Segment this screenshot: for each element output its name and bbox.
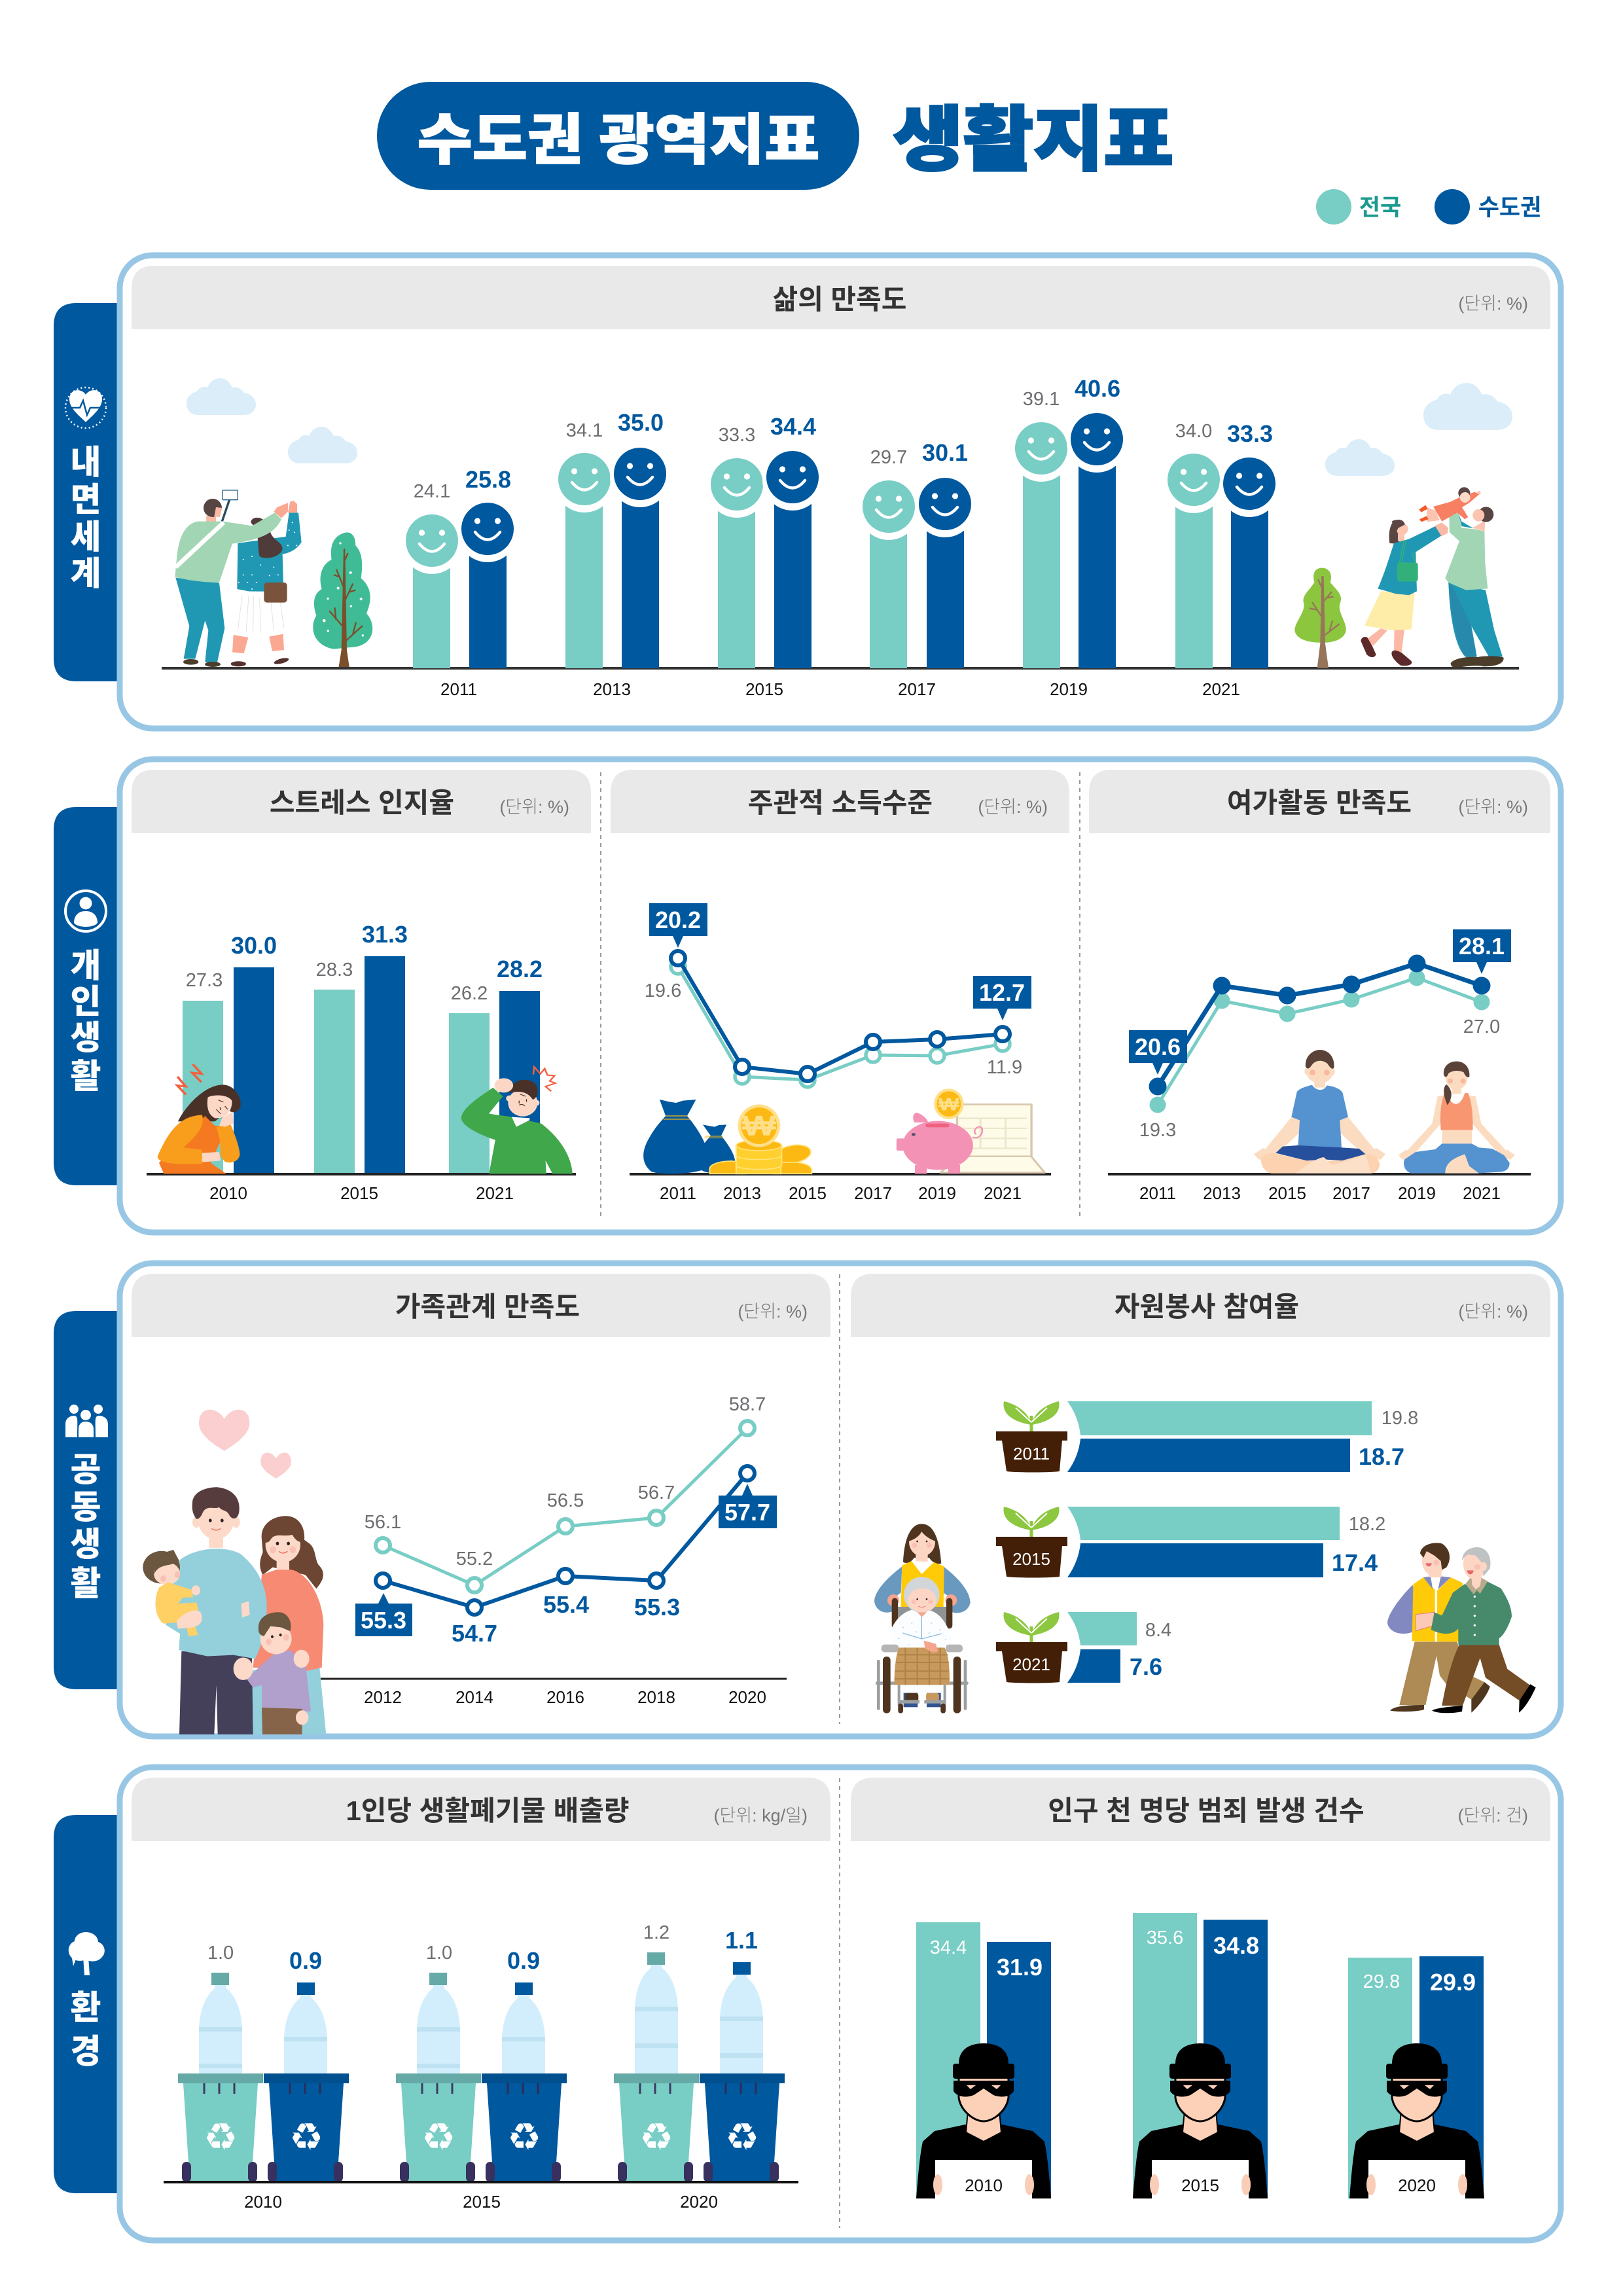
2015 row: 18.2 — [1349, 1514, 1385, 1535]
header: 자원봉사 참여율: (단위: %) — [1458, 1302, 1528, 1321]
2020 bottles and bins: ♻ — [725, 2115, 759, 2159]
2020 bottles and bins: ♻ — [639, 2115, 673, 2159]
2021 row: 2021 — [1012, 1655, 1050, 1674]
illustration: family — [143, 1410, 326, 1734]
line chart: 가족관계 만족도: 2020 — [728, 1687, 766, 1707]
tab: 개인생활: 인 — [71, 983, 101, 1020]
title pill — [377, 82, 859, 190]
2017 bars: 30.1 — [922, 439, 968, 466]
line chart: 가족관계 만족도: 2014 — [455, 1687, 493, 1707]
2021 bars: 33.3 — [1227, 420, 1273, 447]
2021 row: 7.6 — [1130, 1653, 1162, 1680]
callout: 28.1 — [1453, 929, 1511, 974]
line chart: 주관적 소득수준: 19.6 — [645, 980, 681, 1001]
header: 인구 천 명당 범죄 발생 건수: 인구 천 명당 범죄 발생 건수 — [1048, 1795, 1364, 1826]
header: 인구 천 명당 범죄 발생 건수: (단위: 건) — [1457, 1806, 1528, 1825]
line chart: 주관적 소득수준: 2021 — [984, 1183, 1022, 1203]
panel: 개인생활 — [54, 759, 1561, 1232]
callout: 20.6: 20.6 — [1135, 1033, 1181, 1060]
2019 bars: 39.1 — [1023, 389, 1060, 410]
2021 row: 8.4 — [1145, 1620, 1171, 1641]
line chart: 주관적 소득수준: 2011 — [660, 1183, 696, 1203]
header: 스트레스 인지율: (단위: %) — [499, 797, 569, 817]
header: 가족관계 만족도 — [132, 1274, 830, 1337]
bar chart: 자원봉사 참여율 — [996, 1401, 1418, 1683]
2010 bottles and bins: 0.9 — [289, 1947, 322, 1974]
line chart: 주관적 소득수준 — [630, 903, 1051, 1203]
illustration: couple taking selfie — [175, 490, 302, 667]
2015 bars and thief: 35.6 — [1147, 1928, 1183, 1948]
2013 bars: 2013 — [593, 679, 631, 699]
header: 가족관계 만족도: 가족관계 만족도 — [395, 1291, 580, 1322]
bar chart: 스트레스 인지율: 31.3 — [362, 921, 408, 948]
tab: 공동생활 — [54, 1311, 117, 1689]
2021 bars: 2021 — [1202, 679, 1240, 699]
tab: 개인생활: 활 — [71, 1058, 101, 1095]
tab: 내면세계 — [54, 303, 117, 681]
2020 bottles and bins: 2020 — [680, 2192, 718, 2212]
header: 자원봉사 참여율 — [851, 1274, 1550, 1337]
line chart: 가족관계 만족도 — [321, 1394, 787, 1707]
2020 bottles and bins: 1.2 — [643, 1922, 669, 1943]
chart: 생활폐기물 배출량 — [164, 1922, 798, 2212]
2015 row — [996, 1507, 1385, 1577]
2020 bottles and bins — [614, 1922, 785, 2212]
2010 bars and thief: 2010 — [965, 2176, 1003, 2195]
2015 bottles and bins: ♻ — [507, 2115, 541, 2159]
legend: 수도권 — [1478, 195, 1541, 221]
2021 bars: 34.0 — [1175, 421, 1212, 442]
header: 1인당 생활폐기물 배출량 — [132, 1778, 830, 1841]
header: 주관적 소득수준: (단위: %) — [978, 797, 1048, 817]
line chart: 주관적 소득수준: 2015 — [789, 1183, 827, 1203]
2011 bars: 24.1 — [414, 481, 450, 502]
line chart: 여가활동 만족도: 2015 — [1268, 1183, 1306, 1203]
2015 bars: 2015 — [745, 679, 783, 699]
illustration: yoga couple — [1254, 1050, 1515, 1174]
line chart: 여가활동 만족도: 2019 — [1398, 1183, 1436, 1203]
line chart: 가족관계 만족도: 2012 — [364, 1687, 402, 1707]
line chart: 여가활동 만족도: 2013 — [1203, 1183, 1241, 1203]
2015 bars and thief: 2015 — [1181, 2176, 1219, 2195]
line chart: 가족관계 만족도: 56.1 — [365, 1512, 401, 1533]
line chart: 가족관계 만족도: 2016 — [546, 1687, 584, 1707]
2010 bottles and bins: 2010 — [244, 2192, 282, 2212]
callout: 20.6 — [1129, 1030, 1187, 1075]
header: 스트레스 인지율 — [132, 770, 591, 833]
tab: 공동생활: 동 — [71, 1488, 101, 1526]
bar chart: 스트레스 인지율: 28.2 — [497, 956, 543, 982]
2010 bars and thief: 34.4 — [930, 1937, 967, 1958]
line chart: 가족관계 만족도: 55.3 — [634, 1594, 680, 1621]
2019 bars: 40.6 — [1075, 375, 1120, 402]
line chart: 가족관계 만족도: 56.5 — [547, 1490, 584, 1511]
2020 bars and thief — [1348, 1956, 1484, 2198]
header: 1인당 생활폐기물 배출량: (단위: kg/일) — [713, 1806, 808, 1825]
tab: 개인생활: 개 — [71, 947, 101, 984]
line chart: 가족관계 만족도: 56.7 — [638, 1482, 675, 1503]
2011 row: 2011 — [1013, 1444, 1050, 1463]
bar chart: 스트레스 인지율: 27.3 — [186, 970, 223, 991]
clouds — [187, 378, 1512, 476]
icon: person — [65, 891, 106, 931]
illustration: green tree and family lifting child — [1294, 487, 1504, 668]
header: 여가활동 만족도: (단위: %) — [1458, 797, 1528, 817]
2017 bars: 2017 — [898, 679, 936, 699]
2015 bars — [707, 413, 823, 699]
callout: 12.7: 12.7 — [979, 979, 1025, 1006]
illustration: tree — [313, 532, 372, 668]
2010 bottles and bins — [178, 1943, 349, 2212]
2013 bars: 34.1 — [566, 420, 603, 441]
header: 1인당 생활폐기물 배출량: 1인당 생활폐기물 배출량 — [346, 1795, 630, 1826]
line chart: 주관적 소득수준: 2013 — [723, 1183, 761, 1203]
2011 row — [996, 1401, 1418, 1473]
subtitle: 생활지표 — [893, 100, 1174, 179]
callout: 55.3: 55.3 — [361, 1607, 406, 1634]
2010 bottles and bins: 1.0 — [207, 1943, 234, 1964]
tab: 개인생활 — [54, 807, 117, 1185]
2015 row: 17.4 — [1332, 1549, 1378, 1576]
2020 bottles and bins: 1.1 — [725, 1927, 758, 1954]
legend — [1316, 189, 1541, 224]
header: 주관적 소득수준 — [611, 770, 1069, 833]
2015 bars and thief: 34.8 — [1213, 1932, 1259, 1959]
bar chart: 스트레스 인지율: 2021 — [476, 1183, 514, 1203]
illustration: money bags, coins, piggy bank: ₩ — [742, 1110, 776, 1142]
bar chart: 스트레스 인지율: 2010 — [209, 1183, 247, 1203]
bar chart: 스트레스 인지율: 2015 — [340, 1183, 378, 1203]
2019 bars: 2019 — [1050, 679, 1088, 699]
tab: 공동생활: 활 — [71, 1565, 101, 1602]
tab: 개인생활: 생 — [71, 1019, 101, 1056]
2010 bottles and bins: ♻ — [289, 2115, 323, 2159]
2011 bars — [402, 466, 518, 699]
callout: 28.1: 28.1 — [1459, 933, 1505, 960]
2010 bottles and bins: ♻ — [204, 2115, 238, 2159]
illustration: volunteer pushing wheelchair — [874, 1524, 971, 1713]
line chart: 여가활동 만족도: 2017 — [1332, 1183, 1370, 1203]
header: 자원봉사 참여율: 자원봉사 참여율 — [1115, 1291, 1299, 1322]
2015 bottles and bins: 2015 — [463, 2192, 501, 2212]
line chart: 가족관계 만족도: 55.2 — [456, 1549, 493, 1570]
2015 bars: 34.4 — [770, 413, 816, 440]
callout: 20.2 — [649, 903, 707, 948]
tab: 환경: 경 — [71, 2033, 101, 2070]
icon: heart pulse — [65, 387, 106, 428]
bar chart: 스트레스 인지율: 26.2 — [451, 983, 488, 1004]
2015 bars: 33.3 — [719, 425, 755, 446]
header: 삶의 만족도 — [132, 266, 1550, 329]
2020 bars and thief: 29.8 — [1363, 1971, 1400, 1992]
header: 여가활동 만족도: 여가활동 만족도 — [1227, 787, 1412, 818]
bar chart: 스트레스 인지율: 28.3 — [316, 960, 353, 980]
header: 여가활동 만족도 — [1089, 770, 1550, 833]
illustration: money bags, coins, piggy bank — [643, 1088, 1044, 1174]
2019 bars — [1011, 375, 1127, 699]
header: 주관적 소득수준: 주관적 소득수준 — [748, 787, 933, 818]
tab: 내면세계: 내 — [71, 444, 101, 481]
line chart: 가족관계 만족도: 2018 — [637, 1687, 675, 1707]
2011 row: 19.8 — [1382, 1408, 1418, 1429]
tab: 내면세계: 면 — [71, 481, 101, 518]
tab: 공동생활: 생 — [71, 1526, 101, 1563]
title text: 수도권 광역지표 — [418, 109, 819, 171]
tab: 내면세계: 세 — [71, 518, 101, 556]
panel: 환경 — [54, 1767, 1561, 2240]
header: 삶의 만족도: (단위: %) — [1458, 294, 1528, 314]
2010 bars and thief: 31.9 — [997, 1954, 1043, 1981]
line chart: 여가활동 만족도: 27.0 — [1463, 1016, 1500, 1037]
illustration: money bags, coins, piggy bank: ₩ — [938, 1096, 959, 1115]
tab: 환경: 환 — [71, 1989, 101, 2026]
2021 row — [996, 1612, 1171, 1683]
line chart: 가족관계 만족도: 58.7 — [729, 1394, 766, 1415]
2011 bars: 2011 — [440, 679, 477, 699]
callout: 12.7 — [973, 976, 1031, 1020]
legend: 전국 — [1359, 195, 1401, 221]
2015 bottles and bins — [396, 1943, 567, 2212]
line chart: 주관적 소득수준: 2017 — [854, 1183, 892, 1203]
2011 row: 18.7 — [1359, 1443, 1404, 1470]
callout: 57.7 — [719, 1484, 777, 1528]
2015 bottles and bins: 0.9 — [507, 1947, 540, 1974]
line chart: 여가활동 만족도: 2021 — [1463, 1183, 1501, 1203]
2020 bars and thief: 2020 — [1398, 2176, 1436, 2195]
bar chart: 스트레스 인지율 — [147, 921, 576, 1203]
tab: 공동생활: 공 — [71, 1451, 101, 1488]
2015 bars and thief — [1133, 1913, 1268, 2198]
icon: three people — [65, 1405, 108, 1437]
callout: 55.3 — [355, 1593, 412, 1636]
header: 스트레스 인지율: 스트레스 인지율 — [270, 787, 454, 818]
line chart: 여가활동 만족도: 2011 — [1139, 1183, 1176, 1203]
bar chart: 스트레스 인지율: 30.0 — [231, 932, 277, 959]
2015 bottles and bins: ♻ — [421, 2115, 455, 2159]
panel: 공동생활 — [54, 1263, 1561, 1736]
2013 bars: 35.0 — [618, 409, 664, 436]
callout: 20.2: 20.2 — [655, 906, 701, 933]
2015 bottles and bins: 1.0 — [426, 1943, 452, 1964]
line chart: 가족관계 만족도: 55.4 — [543, 1591, 589, 1618]
illustration: volunteer walking with elder — [1387, 1543, 1536, 1713]
line chart: 가족관계 만족도: 54.7 — [452, 1620, 497, 1647]
2021 bars — [1164, 420, 1279, 699]
callout: 57.7: 57.7 — [724, 1499, 770, 1526]
icon: tree — [69, 1932, 105, 1975]
chart: 범죄 발생 건수 — [916, 1913, 1484, 2198]
header: 가족관계 만족도: (단위: %) — [738, 1302, 808, 1321]
line chart: 주관적 소득수준: 2019 — [918, 1183, 956, 1203]
panel: 내면세계 — [54, 255, 1561, 728]
2020 bars and thief: 29.9 — [1430, 1969, 1476, 1996]
line chart: 여가활동 만족도 — [1108, 929, 1531, 1203]
2017 bars: 29.7 — [870, 447, 907, 468]
line chart: 여가활동 만족도: 19.3 — [1139, 1120, 1176, 1141]
tab: 내면세계: 계 — [71, 555, 101, 592]
2011 bars: 25.8 — [465, 466, 511, 493]
2017 bars — [859, 439, 975, 699]
2013 bars — [554, 409, 670, 699]
2015 row: 2015 — [1012, 1549, 1050, 1569]
illustration: stressed woman and man — [158, 1064, 573, 1174]
header: 인구 천 명당 범죄 발생 건수 — [851, 1778, 1550, 1841]
bar chart: 삶의 만족도 — [162, 375, 1519, 699]
header: 삶의 만족도: 삶의 만족도 — [773, 284, 906, 315]
2010 bars and thief — [916, 1922, 1051, 2198]
line chart: 주관적 소득수준: 11.9 — [987, 1057, 1022, 1078]
tab: 환경 — [54, 1815, 117, 2193]
